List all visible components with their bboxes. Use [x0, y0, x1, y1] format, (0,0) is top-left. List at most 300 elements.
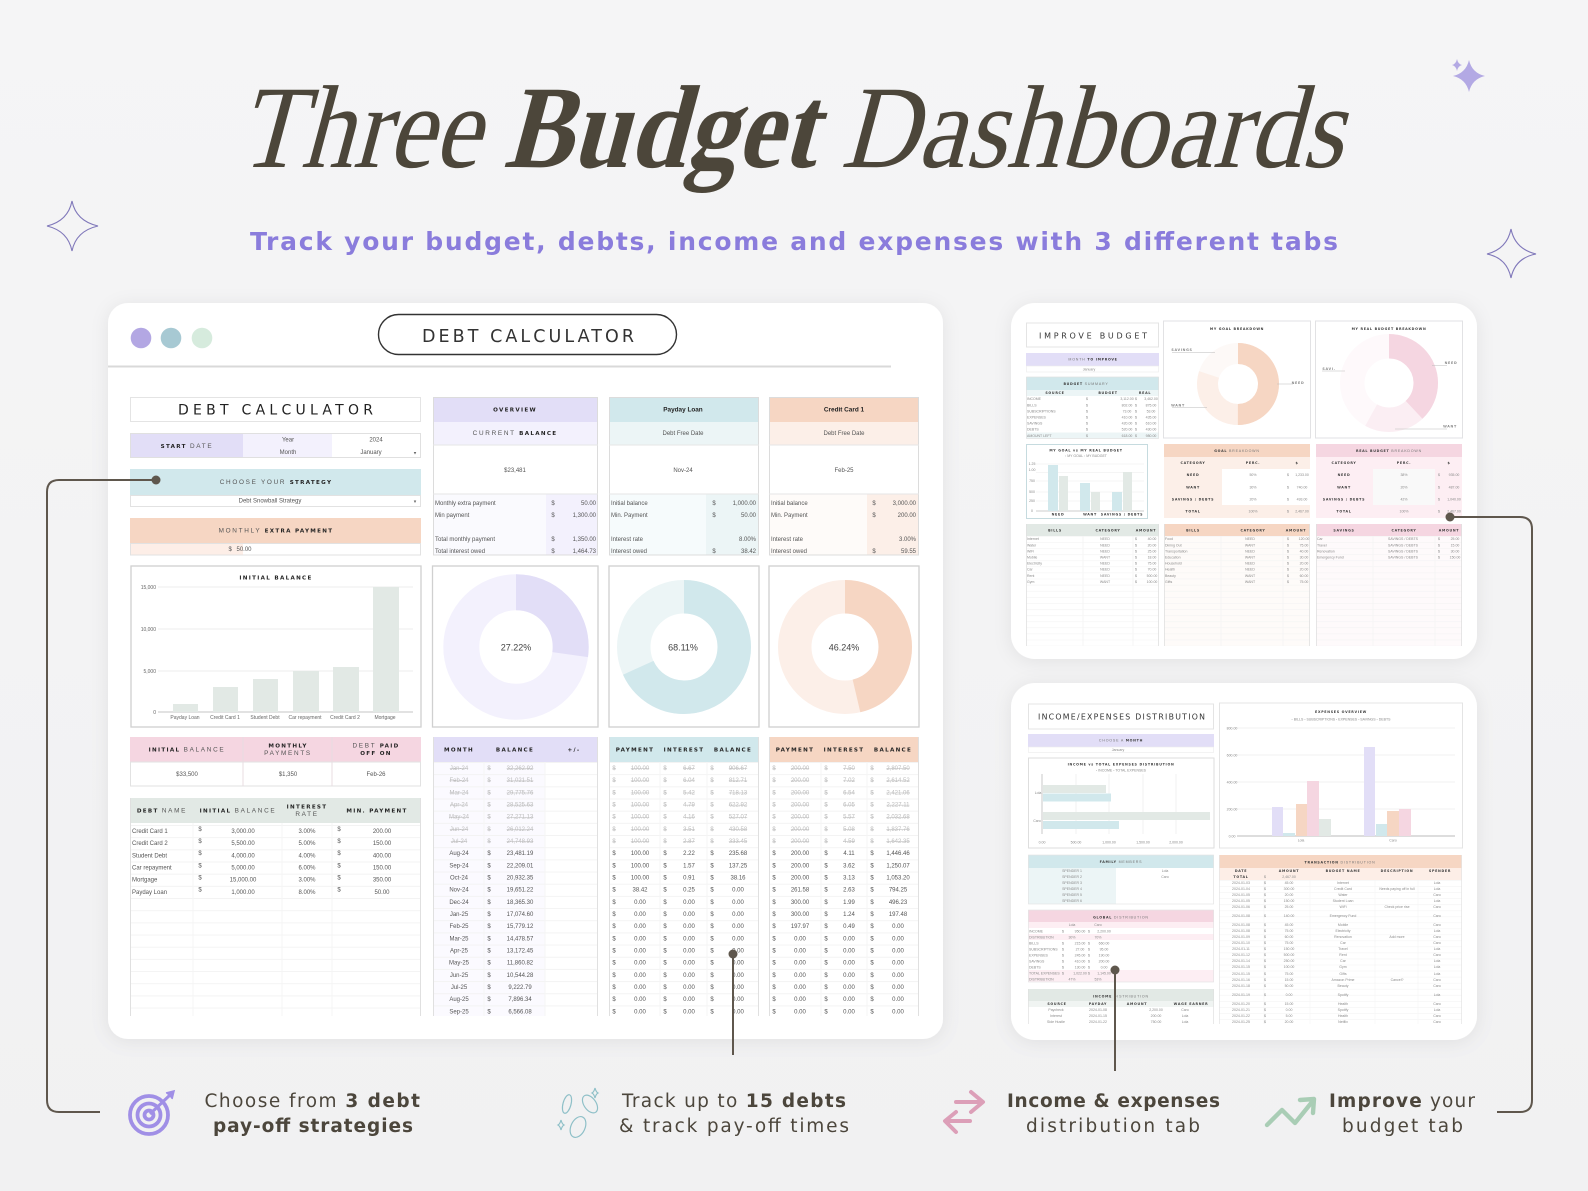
income distribution table: Interest [1050, 1014, 1062, 1018]
income distribution table: SOURCE [1047, 1002, 1067, 1006]
budget summary table: 410.00 [1122, 416, 1132, 420]
goal breakdown table: $ [1287, 510, 1289, 514]
panel: debt calculator [108, 303, 943, 1039]
credit card schedule table: $ [870, 851, 874, 857]
payday schedule table: 0.00 [732, 924, 744, 930]
transaction distribution table: Lola [1434, 993, 1440, 997]
transaction distribution table: Cancel? [1391, 978, 1403, 982]
credit card schedule table: $ [772, 863, 776, 869]
transaction distribution table: SPENDER [1429, 869, 1451, 873]
credit card schedule table: $ [824, 985, 828, 991]
credit card schedule table: $ [824, 876, 828, 882]
budget summary table: $ [1135, 422, 1137, 426]
transaction distribution table: 15.00 [1285, 978, 1293, 982]
payday schedule table: 6.67 [683, 766, 695, 772]
payday schedule table: $ [710, 936, 714, 942]
transaction distribution table: 100.00 [1284, 965, 1294, 969]
budget summary table: BILLS [1027, 403, 1037, 407]
credit card schedule table: 1,250.07 [886, 863, 910, 869]
credit card schedule table: 200.00 [791, 839, 810, 845]
payday schedule table: $ [710, 961, 714, 967]
transaction distribution table: 2024-01-10 [1232, 941, 1250, 945]
global distribution table: GLOBAL DISTRIBUTION [1093, 916, 1149, 920]
global distribution table: SUBSCRIPTIONS [1029, 947, 1058, 951]
credit card schedule table: 0.00 [843, 936, 855, 942]
debt table [130, 798, 421, 1016]
real budget breakdown table: 2,467.00 [1447, 510, 1461, 514]
payday schedule table: 100.00 [631, 851, 650, 857]
credit card schedule table: $ [870, 1009, 874, 1015]
bills table: $ [1135, 574, 1137, 578]
transaction distribution table: Gifts [1339, 972, 1347, 976]
credit card schedule table: $ [824, 961, 828, 967]
credit card schedule table: 0.00 [794, 961, 806, 967]
panel: payday loan: Nov-24 [673, 468, 693, 474]
credit card schedule table: 496.23 [889, 900, 908, 906]
start date: January [360, 450, 382, 456]
goal breakdown table [1164, 444, 1310, 518]
payday schedule table: 0.00 [683, 985, 695, 991]
payday schedule table: 0.00 [683, 1009, 695, 1015]
income distribution table: 2024-01-08 [1089, 1008, 1107, 1012]
transaction distribution table: 15.00 [1285, 1002, 1293, 1006]
credit card schedule table: 0.00 [843, 949, 855, 955]
bills table: $ [1135, 568, 1137, 572]
title: Three [230, 62, 507, 193]
payday schedule table: $ [663, 790, 667, 796]
donut chart: payday loan 68.11%: 68.11% [668, 642, 698, 652]
payday schedule table: $ [612, 949, 616, 955]
payday schedule table: 4.79 [683, 802, 695, 808]
panel: payday loan: Debt Free Date [662, 431, 704, 437]
credit card schedule table: 794.25 [889, 888, 908, 894]
month balance table: Aug-24 [449, 851, 469, 857]
transaction distribution table: 150.00 [1284, 947, 1294, 951]
month balance table: 18,365.30 [507, 900, 534, 906]
choose a month [1028, 734, 1214, 752]
payday schedule table: BALANCE [714, 748, 752, 754]
expenses table: 30.00 [1300, 556, 1308, 560]
expenses table: 60.00 [1300, 574, 1308, 578]
budget summary table: 430.00 [1146, 428, 1156, 432]
panel: payday loan: Interest rate [611, 537, 644, 543]
payday schedule table: 333.45 [729, 839, 748, 845]
transaction distribution table: 75.00 [1285, 941, 1293, 945]
transaction distribution table: 250.00 [1284, 959, 1294, 963]
debt table: 5,500.00 [231, 841, 255, 847]
payday schedule table: $ [710, 924, 714, 930]
panel: credit card 1: Interest owed [771, 549, 807, 555]
real budget breakdown table [1316, 444, 1462, 518]
bills table: CATEGORY [1095, 528, 1121, 532]
month balance table: Mar-25 [449, 936, 469, 942]
credit card schedule table: $ [824, 888, 828, 894]
debt table: $ [337, 839, 341, 845]
payday schedule table: $ [710, 851, 714, 857]
real budget breakdown table: 1,040.00 [1447, 497, 1461, 501]
transaction distribution table: 2024-01-20 [1232, 1002, 1250, 1006]
feature: track debts [558, 1088, 849, 1140]
credit card schedule table: $ [772, 815, 776, 821]
credit card schedule table: 200.00 [791, 766, 810, 772]
donut chart: my goal breakdown [1164, 321, 1310, 438]
expenses table: 120.00 [1299, 537, 1309, 541]
budget summary table: 802.00 [1122, 403, 1132, 407]
payday schedule table: $ [710, 985, 714, 991]
month balance table: Apr-25 [450, 949, 469, 955]
credit card schedule table: $ [772, 888, 776, 894]
global distribution table: 30% [1068, 935, 1076, 939]
month balance table: $ [487, 936, 491, 942]
credit card schedule table: 1,053.20 [886, 876, 910, 882]
payday schedule table: 2.22 [683, 851, 695, 857]
start date: Year [282, 438, 294, 444]
month balance table: Aug-25 [449, 997, 469, 1003]
month balance table: $ [487, 949, 491, 955]
month balance table: $ [487, 827, 491, 833]
horizontal bar chart: income vs expenses: 1,000.00 [1102, 840, 1116, 844]
payday schedule table: $ [710, 900, 714, 906]
transaction distribution table: $ [1264, 1020, 1266, 1024]
debt table: 3.00% [298, 829, 316, 835]
transaction distribution table: $ [1264, 993, 1266, 997]
income distribution table: Paycheck [1048, 1008, 1064, 1012]
transaction distribution table: 2024-01-19 [1232, 993, 1250, 997]
bar chart: goal vs real budget: 500 [1029, 490, 1035, 494]
horizontal bar chart: income vs expenses: 0.00 [1039, 840, 1045, 844]
transaction distribution table: Add more [1389, 935, 1405, 939]
donut chart: my real budget breakdown [1316, 321, 1462, 438]
bar chart: goal vs real budget [1026, 444, 1148, 518]
payday schedule table: 100.00 [631, 827, 650, 833]
payday schedule table: $ [710, 997, 714, 1003]
bar chart: expenses overview: EXPENSES OVERVIEW [1315, 710, 1367, 714]
payday schedule table: 0.00 [634, 973, 646, 979]
icon: trend arrow [1267, 1099, 1314, 1125]
bills table: NEED [1100, 537, 1110, 541]
credit card schedule table: 200.00 [791, 863, 810, 869]
credit card schedule table: $ [772, 912, 776, 918]
distribution title: INCOME/EXPENSES DISTRIBUTION [1038, 712, 1205, 722]
month balance table: 13,172.45 [507, 949, 534, 955]
goal breakdown table: $ [1296, 461, 1298, 465]
credit card schedule table: $ [824, 900, 828, 906]
transaction distribution table: $ [1264, 1014, 1266, 1018]
month balance table: $ [487, 839, 491, 845]
panel: overview: CURRENT BALANCE [473, 430, 557, 437]
tab pill [378, 314, 676, 354]
savings table: 25.00 [1451, 537, 1459, 541]
panel: credit card 1: Feb-25 [834, 468, 854, 474]
payday schedule table: 0.00 [732, 985, 744, 991]
transaction distribution table: Caro [1433, 1002, 1441, 1006]
panel: overview: 50.00 [581, 501, 597, 507]
bills table: 75.00 [1148, 562, 1156, 566]
start date [130, 433, 420, 458]
transaction distribution table: $ [1264, 899, 1266, 903]
connector: track debts [728, 950, 738, 1055]
debt table: 150.00 [373, 841, 392, 847]
expenses table: WANT [1245, 580, 1256, 584]
credit card schedule table: 0.00 [794, 997, 806, 1003]
feature: improve budget: budget tab [1342, 1116, 1463, 1137]
transaction distribution table: Check price rise [1384, 905, 1410, 909]
real budget breakdown table: $ [1438, 485, 1440, 489]
credit card schedule table: $ [870, 839, 874, 845]
credit card schedule table: 3.62 [843, 863, 855, 869]
debt table: 8.00% [298, 890, 316, 896]
transaction distribution table [1219, 855, 1462, 1024]
month to improve: MONTH TO IMPROVE [1068, 358, 1118, 362]
real budget breakdown table: $ [1448, 461, 1450, 465]
family members table: Lola [1162, 869, 1168, 873]
bar chart: initial balance: Student Debt [250, 715, 280, 721]
summary strip: PAYMENTS [264, 750, 312, 757]
transaction distribution table: Caro [1433, 935, 1441, 939]
bar chart: expenses overview: 200.00 [1227, 808, 1237, 812]
payday schedule table: $ [710, 839, 714, 845]
credit card schedule table: $ [772, 802, 776, 808]
budget summary table: EXPENSES [1027, 416, 1047, 420]
payday schedule table: $ [710, 790, 714, 796]
bills table: NEED [1100, 562, 1110, 566]
transaction distribution table: Caro [1433, 914, 1441, 918]
icon: exchange arrows [945, 1092, 983, 1132]
transaction distribution table: 20.00 [1285, 893, 1293, 897]
expenses table: $ [1287, 580, 1289, 584]
month balance table: Jul-25 [451, 985, 468, 991]
payday schedule table: $ [663, 802, 667, 808]
credit card schedule table: $ [824, 924, 828, 930]
month balance table: $ [487, 900, 491, 906]
debt table: 3.00% [298, 878, 316, 884]
family members table: SPENDER 4 [1062, 887, 1082, 891]
bills table: 100.00 [1147, 580, 1157, 584]
monthly extra payment: MONTHLY EXTRA PAYMENT [219, 528, 333, 534]
panel: overview: OVERVIEW [493, 408, 537, 414]
transaction distribution table: 45.00 [1285, 881, 1293, 885]
payday schedule table: 0.00 [634, 997, 646, 1003]
feature: track debts: & track pay-off times [619, 1116, 849, 1137]
month balance table: Feb-24 [449, 778, 469, 784]
payday schedule table: $ [663, 900, 667, 906]
transaction distribution table: Lola [1434, 1008, 1440, 1012]
payday schedule table: $ [663, 936, 667, 942]
transaction distribution table: Beauty [1338, 984, 1349, 988]
credit card schedule table: $ [824, 839, 828, 845]
credit card schedule table: $ [772, 900, 776, 906]
credit card schedule table: 200.00 [791, 827, 810, 833]
family members table: SPENDER 6 [1062, 899, 1082, 903]
month balance table: 23,481.19 [507, 851, 534, 857]
debt table: $ [198, 888, 202, 894]
start date: 2024 [369, 438, 383, 444]
month balance table: 6,566.08 [508, 1009, 532, 1015]
monthly extra payment [130, 518, 421, 555]
expenses table: NEED [1245, 562, 1255, 566]
real budget breakdown table: $ [1438, 497, 1440, 501]
bills table: $ [1135, 562, 1137, 566]
expenses table: CATEGORY [1240, 528, 1266, 532]
income distribution table: 2024-01-22 [1089, 1020, 1107, 1024]
panel: credit card 1 [769, 397, 919, 555]
expenses table: $ [1287, 574, 1289, 578]
credit card schedule table: $ [772, 766, 776, 772]
panel: overview: $ [551, 501, 555, 507]
payday schedule table: $ [612, 888, 616, 894]
horizontal bar chart: income vs expenses: 500.00 [1071, 840, 1081, 844]
credit card schedule table: $ [870, 936, 874, 942]
panel: credit card 1: Initial balance [771, 501, 808, 507]
bar chart: goal vs real budget: 250 [1029, 499, 1035, 503]
savings table: SAVINGS / DEBTS [1388, 556, 1419, 560]
credit card schedule table: 0.00 [892, 936, 904, 942]
transaction distribution table: 25.00 [1285, 905, 1293, 909]
credit card schedule table: $ [870, 790, 874, 796]
debt table: $ [337, 864, 341, 870]
budget summary table: $ [1086, 434, 1088, 438]
bills table: 18.00 [1148, 556, 1156, 560]
credit card schedule table: $ [870, 997, 874, 1003]
bar chart: initial balance: 0 [153, 710, 156, 716]
savings table: SAVINGS [1333, 528, 1355, 532]
panel: credit card 1: 3.00% [899, 537, 917, 543]
month balance table: 31,021.51 [507, 778, 534, 784]
global distribution table: 47% [1068, 977, 1076, 981]
real budget breakdown table: PERC. [1397, 461, 1411, 465]
payday schedule table: 38.42 [632, 888, 648, 894]
debt table: 4.00% [298, 853, 316, 859]
savings table: $ [1438, 549, 1440, 553]
horizontal bar chart: income vs expenses: 1,500.00 [1136, 840, 1150, 844]
month to improve: January [1083, 368, 1095, 372]
debt table: $ [198, 851, 202, 857]
global distribution table: Lola [1069, 923, 1075, 927]
transaction distribution table: 2024-01-06 [1232, 905, 1250, 909]
panel: overview: Monthly extra payment [435, 501, 496, 507]
credit card schedule table: 197.48 [889, 912, 908, 918]
family members table: FAMILY MEMBERS [1100, 860, 1142, 864]
tab pill: DEBT CALCULATOR [422, 327, 634, 347]
budget summary table: $ [1086, 409, 1088, 413]
debt table: Car repayment [132, 866, 172, 872]
transaction distribution table: 2,467.00 [1282, 875, 1296, 879]
payday schedule table: $ [612, 936, 616, 942]
transaction distribution table: 2024-01-08 [1232, 914, 1250, 918]
goal breakdown table: CATEGORY [1180, 461, 1206, 465]
summary strip: $33,500 [176, 772, 198, 778]
real budget breakdown table: $ [1438, 473, 1440, 477]
savings table: SAVINGS / DEBTS [1388, 549, 1419, 553]
credit card schedule table: PAYMENT [776, 748, 814, 754]
debt table: INITIAL BALANCE [200, 808, 276, 814]
credit card schedule table: $ [870, 985, 874, 991]
income distribution table: 2,200.00 [1149, 1008, 1163, 1012]
bar chart: initial balance: Mortgage [374, 715, 396, 721]
payday schedule table: 1.57 [683, 863, 695, 869]
panel: overview: $23,481 [504, 468, 526, 474]
payday schedule table: 622.92 [729, 802, 748, 808]
panel: overview: Total monthly payment [435, 537, 495, 543]
month balance table: $ [487, 778, 491, 784]
bar chart: goal vs real budget: MY GOAL vs MY REAL BUDGET [1049, 448, 1123, 452]
credit card schedule table: $ [824, 802, 828, 808]
bills table: Car [1027, 568, 1033, 572]
payday schedule table: $ [663, 1009, 667, 1015]
transaction distribution table: $ [1264, 935, 1266, 939]
debt table: $ [337, 851, 341, 857]
transaction distribution table: $ [1264, 984, 1266, 988]
payday schedule table: 718.13 [729, 790, 748, 796]
budget summary table: 420.00 [1122, 422, 1132, 426]
credit card schedule table: 2,614.52 [886, 778, 910, 784]
panel: overview [433, 397, 598, 555]
credit card schedule table: 1,642.35 [886, 839, 910, 845]
transaction distribution table: $ [1264, 887, 1266, 891]
payday schedule table: 0.00 [634, 900, 646, 906]
budget summary table: BUDGET [1098, 391, 1118, 395]
bills table: NEED [1100, 543, 1110, 547]
transaction distribution table: Renovation [1334, 935, 1352, 939]
transaction distribution table: 2024-01-03 [1232, 881, 1250, 885]
month balance table: Jun-25 [450, 973, 469, 979]
global distribution table: $ [1088, 965, 1090, 969]
transaction distribution table: $ [1264, 947, 1266, 951]
credit card schedule table: 1.99 [843, 900, 855, 906]
bills table: 500.00 [1147, 574, 1157, 578]
credit card schedule table: 1.24 [843, 912, 855, 918]
transaction distribution table: 75.00 [1285, 972, 1293, 976]
credit card schedule table: $ [824, 827, 828, 833]
transaction distribution table: 2024-01-08 [1232, 923, 1250, 927]
summary strip: Feb-26 [366, 772, 386, 778]
title: Dashboards [833, 62, 1370, 193]
panel: payday loan [609, 397, 759, 555]
global distribution table: 200.00 [1099, 959, 1109, 963]
transaction distribution table: Health [1338, 1014, 1348, 1018]
month balance table: Sep-25 [449, 1009, 469, 1015]
credit card schedule table: $ [772, 949, 776, 955]
bar chart: initial balance: Credit Card 2 [330, 715, 360, 721]
expenses table: WANT [1245, 574, 1256, 578]
credit card schedule table: 0.00 [892, 924, 904, 930]
debt table: MIN. PAYMENT [346, 808, 408, 814]
payday schedule table: 906.67 [729, 766, 748, 772]
global distribution table: BILLS [1029, 941, 1039, 945]
payday schedule table: $ [663, 827, 667, 833]
bar chart: expenses overview: Lola [1298, 838, 1304, 842]
income distribution table: 200.00 [1151, 1014, 1161, 1018]
strategy selector: CHOOSE YOUR STRATEGY [220, 479, 332, 486]
transaction distribution table: 2024-01-25 [1232, 1020, 1250, 1024]
feature: choose strategies: pay-off strategies [213, 1116, 413, 1137]
budget summary table: REAL [1139, 391, 1151, 395]
credit card schedule table: 300.00 [791, 900, 810, 906]
expenses table: 20.00 [1300, 562, 1308, 566]
expenses table: $ [1287, 549, 1289, 553]
payday schedule table: $ [710, 1009, 714, 1015]
budget summary table: SAVINGS [1027, 422, 1043, 426]
payday schedule table: 4.16 [683, 815, 695, 821]
expenses table: 20.00 [1300, 568, 1308, 572]
payday schedule table: $ [612, 876, 616, 882]
panel: credit card 1: $ [872, 549, 876, 555]
donut chart: my goal breakdown: NEED [1292, 381, 1304, 385]
summary strip: INITIAL BALANCE [149, 746, 225, 754]
icon: filled sparkle top right [1452, 59, 1485, 92]
credit card schedule table: $ [772, 961, 776, 967]
month balance table: Nov-24 [449, 888, 469, 894]
